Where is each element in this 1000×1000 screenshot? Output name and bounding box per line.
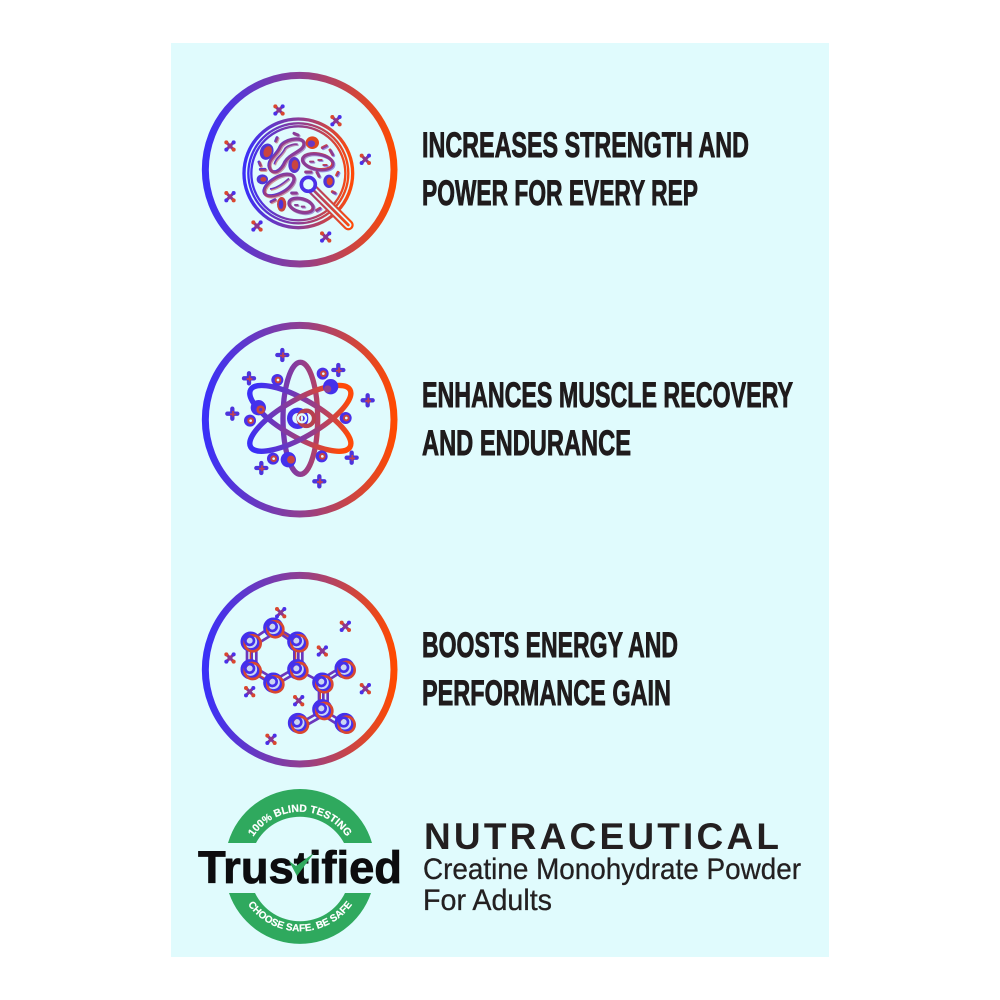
wordmark: Trustified bbox=[198, 842, 402, 893]
panel: background bbox=[171, 43, 829, 957]
green arc top bbox=[228, 789, 372, 843]
product description: Creatine Monohydrate Powder bbox=[423, 853, 801, 886]
check mark bbox=[289, 853, 314, 876]
nucleus bbox=[290, 410, 314, 426]
product description: For Adults bbox=[423, 884, 552, 917]
probe bbox=[301, 177, 348, 225]
crosses bbox=[224, 607, 371, 745]
heading: energy: PERFORMANCE GAIN bbox=[422, 674, 671, 713]
brand: NUTRACEUTICAL: NUTRACEUTICAL bbox=[424, 816, 779, 857]
ring bbox=[205, 75, 394, 264]
dish bbox=[244, 119, 353, 228]
heading: recovery bbox=[422, 376, 793, 463]
ring bbox=[205, 575, 394, 764]
icon: atom bbox=[205, 325, 394, 514]
green arc bottom bbox=[229, 893, 371, 944]
icon: molecule bbox=[205, 575, 394, 764]
heading: strength: INCREASES STRENGTH AND bbox=[422, 126, 749, 165]
crosses bbox=[224, 104, 371, 243]
atoms bbox=[242, 619, 355, 733]
arc text bottom: CHOOSE SAFE. BE SAFE bbox=[249, 900, 352, 932]
electrons bbox=[251, 379, 338, 467]
heading: strength: POWER FOR EVERY REP bbox=[422, 174, 698, 213]
icon: cell in petri dish bbox=[205, 75, 394, 264]
bonds bbox=[247, 626, 346, 728]
small particles bbox=[227, 350, 373, 486]
arc text top: 100% BLIND TESTING bbox=[248, 804, 352, 836]
heading: strength bbox=[422, 126, 749, 213]
ring bbox=[205, 325, 394, 514]
orbits bbox=[241, 362, 359, 474]
heading: energy: BOOSTS ENERGY AND bbox=[422, 626, 678, 665]
product description bbox=[423, 853, 801, 917]
heading: recovery: AND ENDURANCE bbox=[422, 424, 631, 463]
organelles bbox=[257, 133, 339, 216]
heading: energy bbox=[422, 626, 678, 713]
heading: recovery: ENHANCES MUSCLE RECOVERY bbox=[422, 376, 793, 415]
badge: Trustified bbox=[198, 789, 402, 944]
